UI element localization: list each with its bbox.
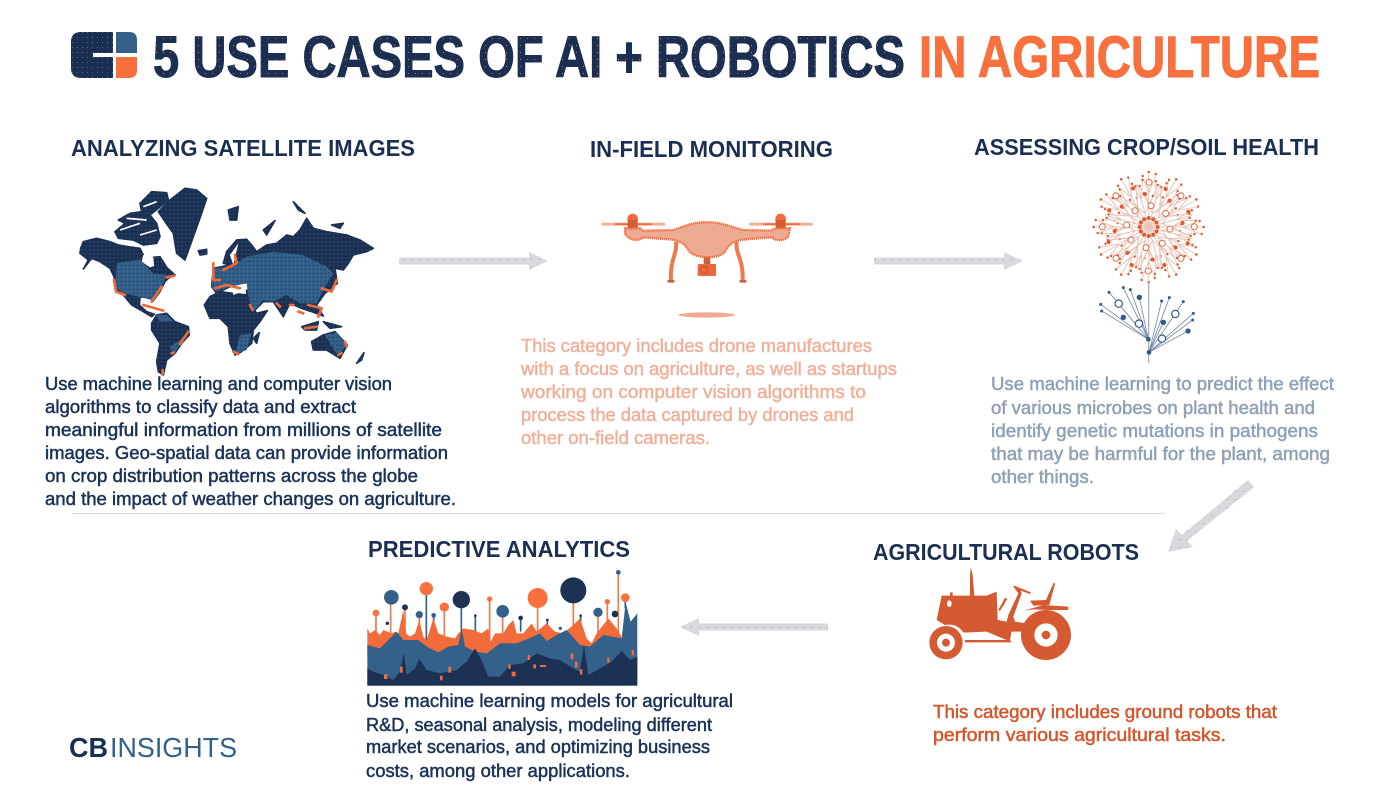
icon: drone [602,214,813,318]
text: satellite images description: Use machine learning and computer vision [45,374,392,394]
text: crop health description: other things. [991,467,1094,487]
text: predictive analytics description: costs, among other applications. [366,761,630,781]
panel: agricultural robots [873,539,1277,745]
arrow: crop health to robots [1168,480,1254,552]
heading: assessing crop/soil health: ASSESSING CROP/SOIL HEALTH [974,134,1319,160]
arrow: monitoring to crop health [874,252,1023,270]
panel: assessing crop and soil health [974,134,1334,487]
text: robots description: perform various agricultural tasks. [933,725,1226,745]
text: satellite images description: and the impact of weather changes on agriculture. [45,489,456,509]
text: crop health description: Use machine learning to predict the effect [991,374,1334,394]
text: crop health description: that may be harmful for the plant, among [991,444,1330,464]
text: predictive analytics description: R&D, seasonal analysis, modeling different [366,715,712,735]
panel: in-field monitoring [520,136,897,448]
text: drone description: This category includes drone manufactures [521,336,872,356]
text: crop health description [991,374,1334,487]
heading: analyzing satellite images: ANALYZING SATELLITE IMAGES [71,135,415,161]
text: drone description [520,336,897,448]
text: satellite images description: algorithms to classify data and extract [45,397,356,417]
text: drone description: working on computer vision algorithms to [520,382,866,402]
arrow: robots to predictive analytics [680,618,828,636]
heading: predictive analytics: PREDICTIVE ANALYTICS [368,536,630,562]
text: satellite images description: on crop distribution patterns across the globe [45,466,418,486]
text: drone description: process the data captured by drones and [521,405,854,425]
icon: tractor [929,567,1071,660]
logo: CB Insights: INSIGHTS [110,732,237,763]
logo icon [71,32,137,78]
text: robots description [933,702,1277,745]
text: robots description: This category includes ground robots that [933,702,1277,722]
panel: predictive analytics [366,536,733,781]
heading: in-field monitoring: IN-FIELD MONITORING [590,136,833,162]
icon: dandelion [1092,171,1205,363]
text: crop health description: identify genetic mutations in pathogens [991,421,1318,441]
text: satellite images description: images. Geo-spatial data can provide information [45,443,448,463]
text: drone description: with a focus on agriculture, as well as startups [520,359,897,379]
title: 5 USE CASES OF AI + ROBOTICS [153,25,905,90]
text: predictive analytics description [366,691,733,781]
text: satellite images description: meaningful information from millions of satellite [45,420,442,440]
panel: analyzing satellite images [45,135,456,509]
text: predictive analytics description: Use machine learning models for agricultural [366,691,733,711]
title: IN AGRICULTURE [919,25,1320,90]
logo: CB Insights: CB [69,732,108,763]
arrow: satellite to monitoring [399,252,548,270]
area chart with bubbles [367,570,637,686]
world map [80,188,373,375]
text: predictive analytics description: market scenarios, and optimizing business [366,737,710,757]
heading: agricultural robots: AGRICULTURAL ROBOTS [873,539,1139,565]
text: satellite images description [45,374,456,509]
text: drone description: other on-field cameras. [521,428,710,448]
text: crop health description: of various microbes on plant health and [991,398,1315,418]
